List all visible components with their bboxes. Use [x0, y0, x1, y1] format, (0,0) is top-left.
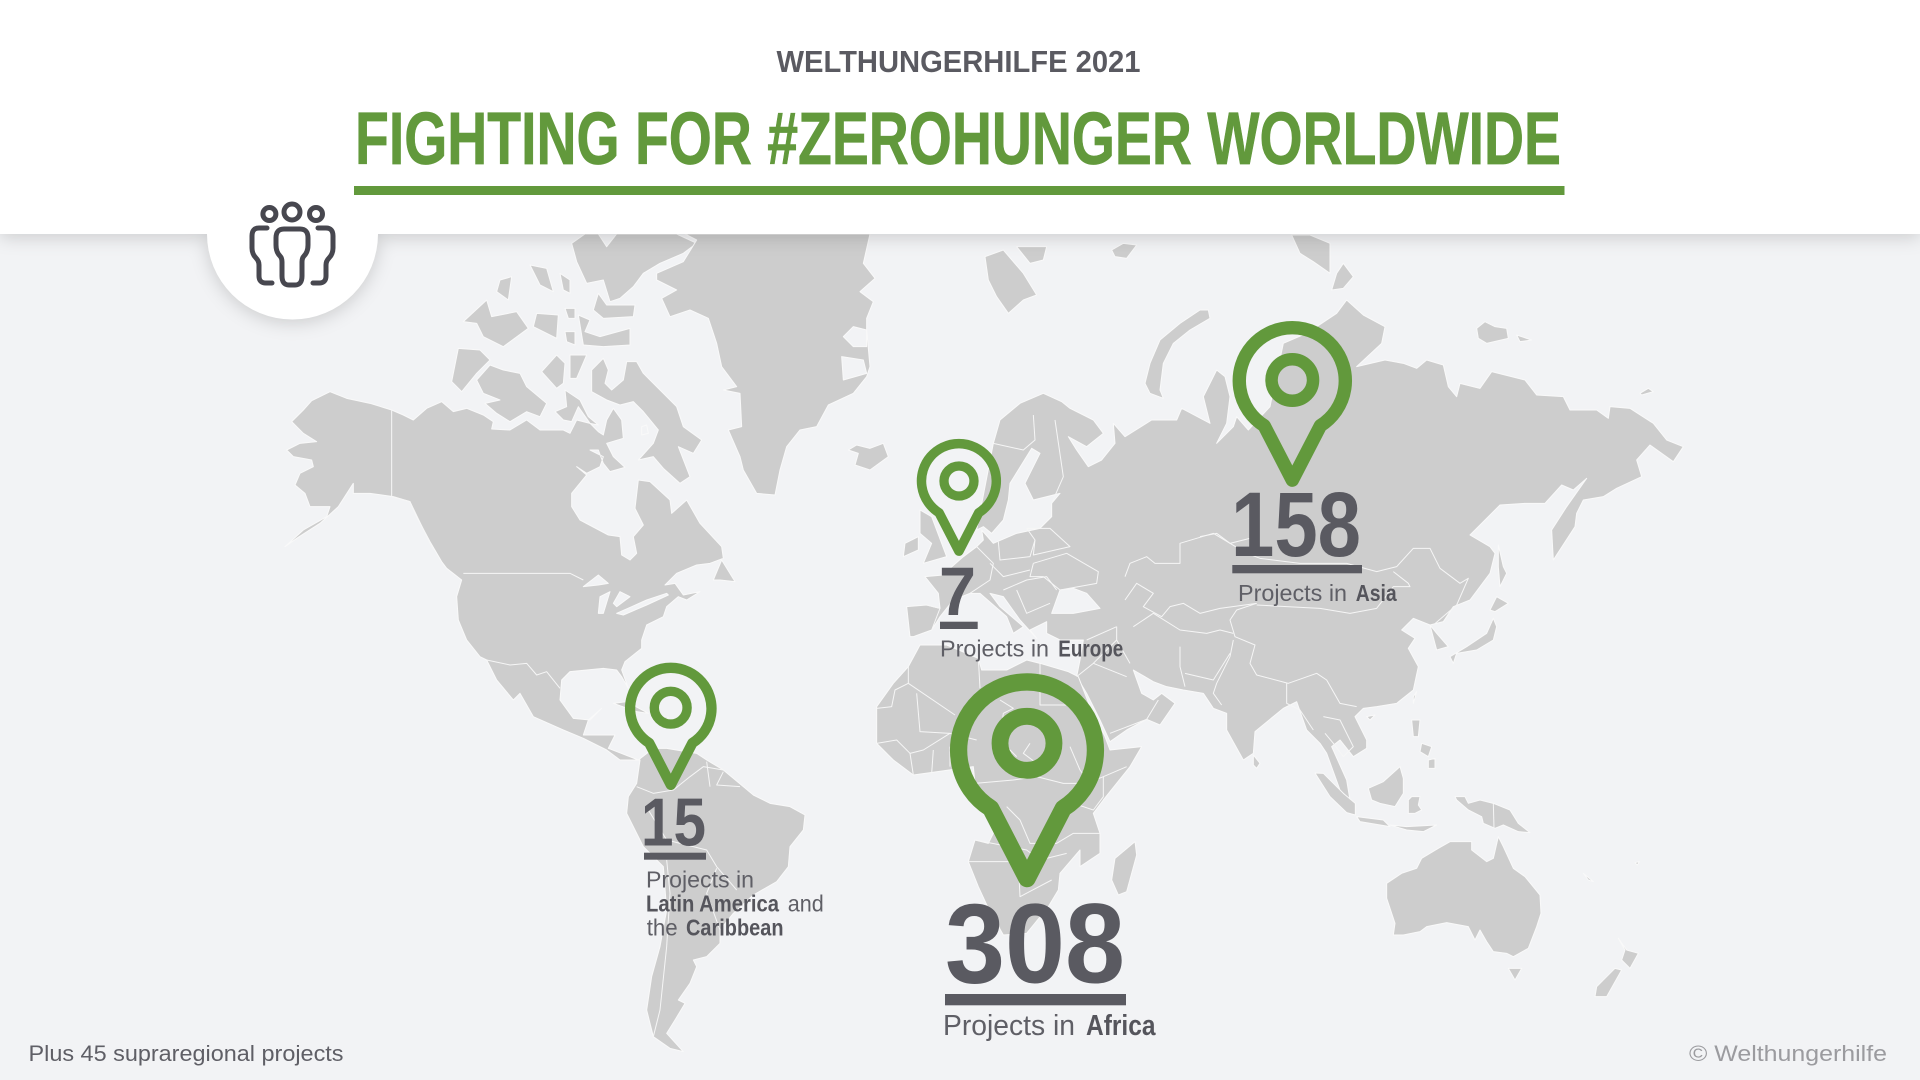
stat: Asia: 158 [1231, 474, 1361, 576]
stat: Latin America and the Caribbean: and [788, 891, 824, 917]
map: Africa [877, 645, 1142, 935]
map: northern islands [903, 235, 1653, 768]
map: New Zealand [1595, 938, 1638, 997]
map: North America [285, 234, 735, 760]
title underline [354, 186, 1564, 195]
pin: Asia [1239, 328, 1345, 480]
stat: Latin America and the Caribbean: the [647, 915, 678, 941]
copyright: © Welthungerhilfe [1689, 1041, 1887, 1066]
stat: Europe: 7 [939, 553, 976, 630]
map: Eurasia [907, 300, 1683, 800]
subtitle: WELTHUNGERHILFE 2021 [776, 45, 1141, 79]
map: Eurasia and Africa [877, 235, 1683, 935]
stat: Latin America and the Caribbean [641, 784, 824, 941]
map: Arctic and Canadian islands [452, 234, 735, 582]
map: Great Lakes [583, 575, 668, 615]
footnote: supraregional projects: Plus 45 supraregional projects [28, 1041, 344, 1066]
pin: Latin America [630, 668, 711, 785]
header background with icon tab [0, 0, 1920, 320]
stat: Africa [943, 880, 1156, 1042]
stat: Africa: Africa [1086, 1010, 1156, 1042]
map: Southeast Asia and Oceania [1315, 720, 1639, 997]
stat: Asia: Asia [1356, 580, 1397, 606]
map: Greenland and Iceland [657, 234, 888, 495]
map: North American borders [392, 410, 583, 688]
stat: Latin America and the Caribbean: Projects in [646, 867, 754, 893]
pin: Africa [959, 682, 1095, 879]
stat: Latin America and the Caribbean: 15 [641, 784, 706, 860]
stat: Africa: 308 [945, 880, 1125, 1006]
title: FIGHTING FOR #ZEROHUNGER WORLDWIDE [355, 97, 1561, 180]
icon: group of people [252, 204, 333, 285]
pin: Europe [921, 444, 996, 551]
map: Tasmania [1508, 968, 1522, 980]
world map [285, 234, 1683, 1052]
stat: Europe [939, 553, 1123, 662]
map: Madagascar [1112, 842, 1137, 895]
map: Black Sea [1052, 588, 1100, 613]
stat: Africa: Projects in [943, 1010, 1075, 1042]
stat: Latin America and the Caribbean: Latin America [646, 891, 779, 917]
map: South America and Caribbean [613, 702, 805, 1052]
stat: Asia: Projects in [1238, 580, 1347, 606]
stat: Europe: Projects in [940, 636, 1049, 662]
map: country borders of Europe, Africa and Asia [877, 415, 1468, 897]
map: Australia [1387, 837, 1541, 957]
header panel [0, 0, 1920, 320]
stat: Europe: Europe [1058, 636, 1123, 662]
stat: Latin America and the Caribbean: Caribbean [686, 915, 784, 941]
